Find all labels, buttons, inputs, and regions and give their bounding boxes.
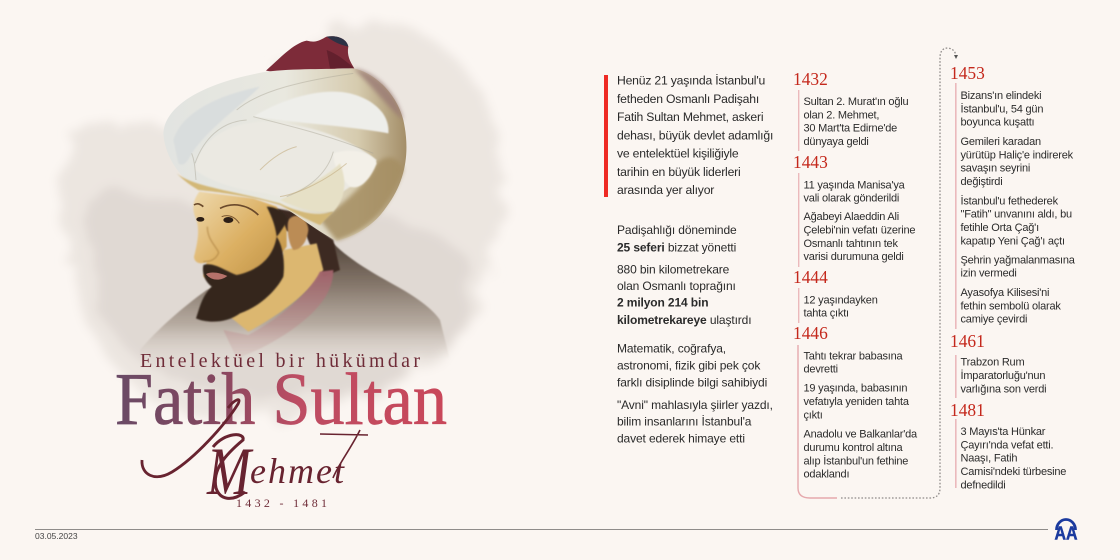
- fez: [266, 36, 354, 74]
- 1461 entry: 1461: [950, 331, 985, 351]
- turban: [163, 68, 406, 241]
- sash: [223, 270, 333, 358]
- 1453 entry: izin vermedi: [960, 268, 1017, 280]
- 1453 entry: Bizans'ın elindeki: [960, 90, 1041, 102]
- 1453 entry: Gemileri karadan: [960, 136, 1041, 148]
- 1432 entry: olan 2. Mehmet,: [804, 109, 879, 121]
- 1446 entry: vefatıyla yeniden tahta: [804, 396, 910, 408]
- 1446 entry: Tahtı tekrar babasına: [804, 350, 904, 362]
- 1443 entry: vali olarak gönderildi: [804, 193, 899, 205]
- fact: sciences: farklı disiplinde bilgi sahibiydi: [617, 376, 767, 390]
- 1443 entry: Osmanlı tahtının tek: [804, 238, 898, 250]
- 1481 entry: Çayırı'nda vefat etti.: [960, 439, 1054, 451]
- fact: territory: 2 milyon 214 bin: [617, 296, 708, 310]
- 1446 entry: alıp İstanbul'un fethine: [804, 454, 908, 467]
- body: [140, 243, 450, 360]
- 1481 entry: Camisi'ndeki türbesine: [960, 466, 1066, 478]
- 1443 entry: [793, 152, 915, 263]
- intro text: tarihin en büyük liderleri: [617, 165, 741, 179]
- 1461 entry: varlığına son verdi: [960, 383, 1046, 395]
- red accent bar: [604, 75, 608, 197]
- fact: sciences: Matematik, coğrafya,: [617, 341, 726, 355]
- 1443 entry: 1443: [793, 152, 828, 172]
- 1453 entry: İstanbul'u, 54 gün: [960, 102, 1043, 115]
- logo: AA: AA: [1054, 524, 1078, 544]
- 1481 entry: Naaşı, Fatih: [960, 453, 1017, 465]
- intro text: Henüz 21 yaşında İstanbul'u: [617, 74, 765, 88]
- 1443 entry: varisi durumuna geldi: [804, 251, 904, 263]
- 1446 entry: çıktı: [804, 409, 823, 421]
- intro text: Fatih Sultan Mehmet, askeri: [617, 110, 763, 124]
- face: [193, 192, 287, 287]
- nose shading: [203, 227, 219, 262]
- 1453 entry: Şehrin yağmalanmasına: [960, 254, 1076, 266]
- life years: 1432 - 1481: [236, 496, 327, 510]
- fact: territory: ulaştırdı: [707, 313, 751, 327]
- neck and collar: [230, 243, 323, 332]
- 1446 entry: durumu kontrol altına: [804, 442, 904, 454]
- 1461 entry: İmparatorluğu'nun: [960, 369, 1045, 382]
- 1453 entry: savaşın seyrini: [960, 163, 1030, 175]
- ear: [288, 216, 308, 250]
- 1461 entry: Trabzon Rum: [960, 357, 1024, 369]
- 1453 entry: kapatıp Yeni Çağ'ı açtı: [960, 235, 1065, 247]
- 1446 entry: devretti: [804, 364, 838, 376]
- 1444 entry: 1444: [793, 267, 828, 287]
- lips: [206, 272, 227, 280]
- 1443 entry: 11 yaşında Manisa'ya: [804, 179, 906, 191]
- fact: sciences: astronomi, fizik gibi pek çok: [617, 358, 761, 372]
- 1444 entry: [793, 267, 878, 320]
- fact: campaigns: bizzat yönetti: [665, 240, 736, 254]
- fact: campaigns: Padişahlığı döneminde: [617, 223, 737, 237]
- 1432 entry: 30 Mart'ta Edirne'de: [804, 123, 897, 135]
- intro text: arasında yer alıyor: [617, 183, 714, 197]
- 1481 entry: defnedildi: [960, 479, 1006, 491]
- watercolor wash: [63, 20, 501, 416]
- fact: territory: 880 bin kilometrekare: [617, 262, 730, 276]
- date: 03.05.2023: [35, 531, 78, 541]
- eyes and brows: [194, 204, 258, 223]
- 1453 entry: boyunca kuşattı: [960, 117, 1035, 129]
- 1446 entry: Anadolu ve Balkanlar'da: [804, 429, 918, 441]
- hair and beard: [196, 207, 288, 322]
- 1481 entry: [950, 400, 1066, 491]
- 1461 entry: [950, 331, 1046, 395]
- 1446 entry: odaklandı: [804, 469, 849, 481]
- fact: poetry: davet ederek himaye etti: [617, 431, 745, 445]
- 1453 entry: 1453: [950, 63, 985, 83]
- timeline bars: [798, 83, 957, 488]
- hair behind ear: [267, 207, 340, 277]
- intro text: ve entelektüel kişiliğiyle: [617, 147, 739, 161]
- script name: Mehmet: [142, 400, 368, 509]
- 1443 entry: Ağabeyi Alaeddin Ali: [804, 211, 899, 223]
- 1432 entry: dünyaya geldi: [804, 136, 869, 148]
- 1453 entry: "Fatih" unvanını aldı, bu: [960, 209, 1072, 221]
- 1446 entry: [793, 323, 918, 481]
- intro text: dehası, büyük devlet adamlığı: [617, 128, 773, 142]
- 1481 entry: 1481: [950, 400, 985, 420]
- fact: territory: olan Osmanlı toprağını: [617, 279, 736, 293]
- 1446 entry: 19 yaşında, babasının: [804, 383, 907, 395]
- intro text: fetheden Osmanlı Padişahı: [617, 92, 759, 106]
- 1432 entry: [793, 69, 908, 148]
- 1453 entry: camiye çevirdi: [960, 314, 1027, 326]
- 1453 entry: [950, 63, 1076, 326]
- 1432 entry: Sultan 2. Murat'ın oğlu: [804, 96, 908, 108]
- 1453 entry: yürütüp Haliç'e indirerek: [960, 149, 1074, 161]
- subtitle: Entelektüel bir hükümdar: [140, 350, 420, 372]
- title: Fatih Sultan: Fatih Sultan: [115, 359, 447, 441]
- script name: Mehmet: ehmet: [250, 451, 345, 491]
- portrait: [140, 36, 450, 360]
- 1453 entry: fethin sembolü olarak: [960, 300, 1061, 312]
- 1446 entry: 1446: [793, 323, 828, 343]
- 1453 entry: değiştirdi: [960, 176, 1002, 188]
- 1453 entry: fetihle Orta Çağ'ı: [960, 222, 1039, 234]
- fact: territory: kilometrekareye: [617, 313, 707, 327]
- 1443 entry: Çelebi'nin vefatı üzerine: [804, 224, 915, 236]
- fact: campaigns: 25 seferi: [617, 240, 665, 254]
- timeline connector: [798, 48, 958, 498]
- 1453 entry: İstanbul'u fethederek: [960, 194, 1059, 207]
- 1432 entry: 1432: [793, 69, 828, 89]
- 1481 entry: 3 Mayıs'ta Hünkar: [960, 426, 1046, 438]
- fact: poetry: "Avni" mahlasıyla şiirler yazdı,: [617, 398, 773, 412]
- 1444 entry: tahta çıktı: [804, 308, 849, 320]
- 1453 entry: Ayasofya Kilisesi'ni: [960, 287, 1049, 299]
- script name: Mehmet: M: [206, 433, 254, 509]
- fact: poetry: bilim insanlarını İstanbul'a: [617, 415, 752, 429]
- 1444 entry: 12 yaşındayken: [804, 294, 878, 306]
